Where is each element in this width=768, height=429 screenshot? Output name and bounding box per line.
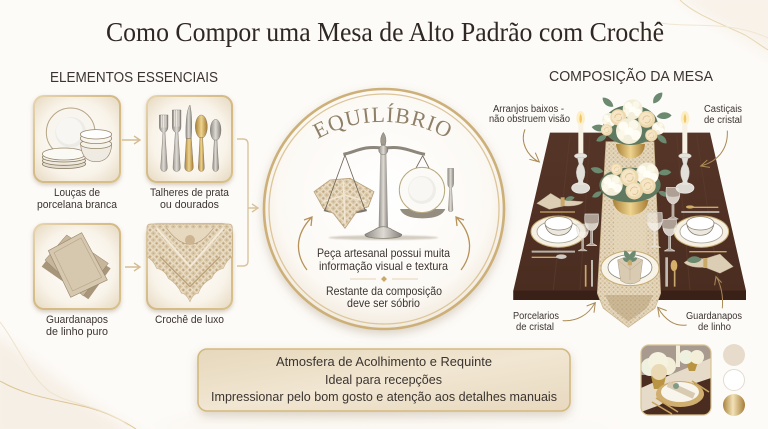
card: crochê de luxo [147,224,232,309]
arrow: guardanapos para crochê [125,263,140,271]
place setting centre [601,249,659,286]
napkin right [684,254,733,273]
label: louças [37,187,118,211]
arrow: castiçais [701,131,727,167]
label: arranjos baixos: Arranjos baixos - [493,104,564,115]
plate pan [415,156,430,170]
label: arranjos baixos: não obstruem visão [489,114,570,125]
heading: elementos essenciais: ELEMENTOS ESSENCIAIS [50,70,218,86]
place setting left [531,216,586,247]
label: porcelarios: de cristal [516,322,554,333]
text: peça artesanal: informação visual e textura [319,259,448,273]
label: guardanapos de linho: Guardanapos [686,311,742,322]
callout: atmosfera: Ideal para recepções [325,372,442,387]
flower arrangement bottom [590,162,671,215]
illustration: table setting [513,90,746,327]
candle left [572,111,590,193]
label: guardanapos [46,314,108,338]
swatch: white [724,370,744,390]
arrow: right curved [456,217,470,270]
label: talheres: ou dourados [160,199,219,211]
label: arranjos baixos [489,104,570,125]
icon: divider star [381,276,387,282]
title: Como Compor uma Mesa de Alto Padrão com Crochê [106,17,664,47]
text: restante: Restante da composição [326,284,442,298]
label: guardanapos de linho [686,311,742,333]
candle right [676,111,694,193]
arrow: guardanapos up [715,277,723,308]
circle frame [264,89,504,329]
text: restante [326,284,442,310]
arrow: louças para talheres [122,136,140,144]
label: talheres [150,187,230,211]
text: peça artesanal [317,246,450,273]
connector line: right [570,379,642,381]
swatch: gold [723,394,745,416]
callout: atmosfera: Impressionar pelo bom gosto e atenção aos detalhes manuais [211,389,557,404]
flower arrangement top [591,90,672,159]
arrow: arranjos [523,129,539,162]
card: talheres [147,96,232,182]
text: restante: deve ser sóbrio [347,296,420,310]
arrow: porcelarios [563,303,595,321]
callout: atmosfera: Atmosfera de Acolhimento e Requinte [276,354,492,369]
card: guardanapos [34,224,120,309]
label: castiçais: de cristal [704,115,742,126]
label: guardanapos: de linho puro [46,326,108,338]
cutlery [532,205,727,287]
heading: composição da mesa: COMPOSIÇÃO DA MESA [549,68,713,85]
swatch: beige [723,344,745,366]
label: guardanapos de linho: de linho [698,322,731,333]
decorative swoosh: top right [660,0,768,62]
arrow: bracket to equilíbrio [237,139,258,266]
label: crochê: Crochê de luxo [155,314,224,326]
label: porcelarios [513,311,559,333]
label: louças: Louças de [54,187,100,199]
decorative swoosh: bottom left [0,322,640,429]
table runner [597,142,661,327]
panel: composição da mesa [489,90,746,333]
thumbnail: table photo [641,345,711,415]
divider [350,278,418,280]
crochet doily pan [324,210,367,213]
wine glasses [577,187,680,251]
label: louças: porcelana branca [37,199,118,211]
label: castiçais [704,104,742,126]
arrow: left curved [298,217,312,270]
label: guardanapos: Guardanapos [46,314,108,326]
callout: atmosfera [198,349,570,411]
label: castiçais: Castiçais [704,104,742,115]
icon: balance scale [314,132,454,240]
panel: elementos essenciais [34,96,258,338]
heading: equilíbrio: EQUILÍBRIO [312,103,451,139]
arrow: guardanapos bottom [658,307,687,325]
text: peça artesanal: Peça artesanal possui muita [317,246,450,260]
place setting right [674,216,729,247]
panel: equilíbrio [258,87,510,339]
table top [513,133,746,300]
napkin left [537,193,583,209]
label: porcelarios: Porcelarios [513,311,559,322]
label: talheres: Talheres de prata [150,187,230,199]
connector line: left [34,379,198,381]
card: louças de porcelana [34,96,120,182]
